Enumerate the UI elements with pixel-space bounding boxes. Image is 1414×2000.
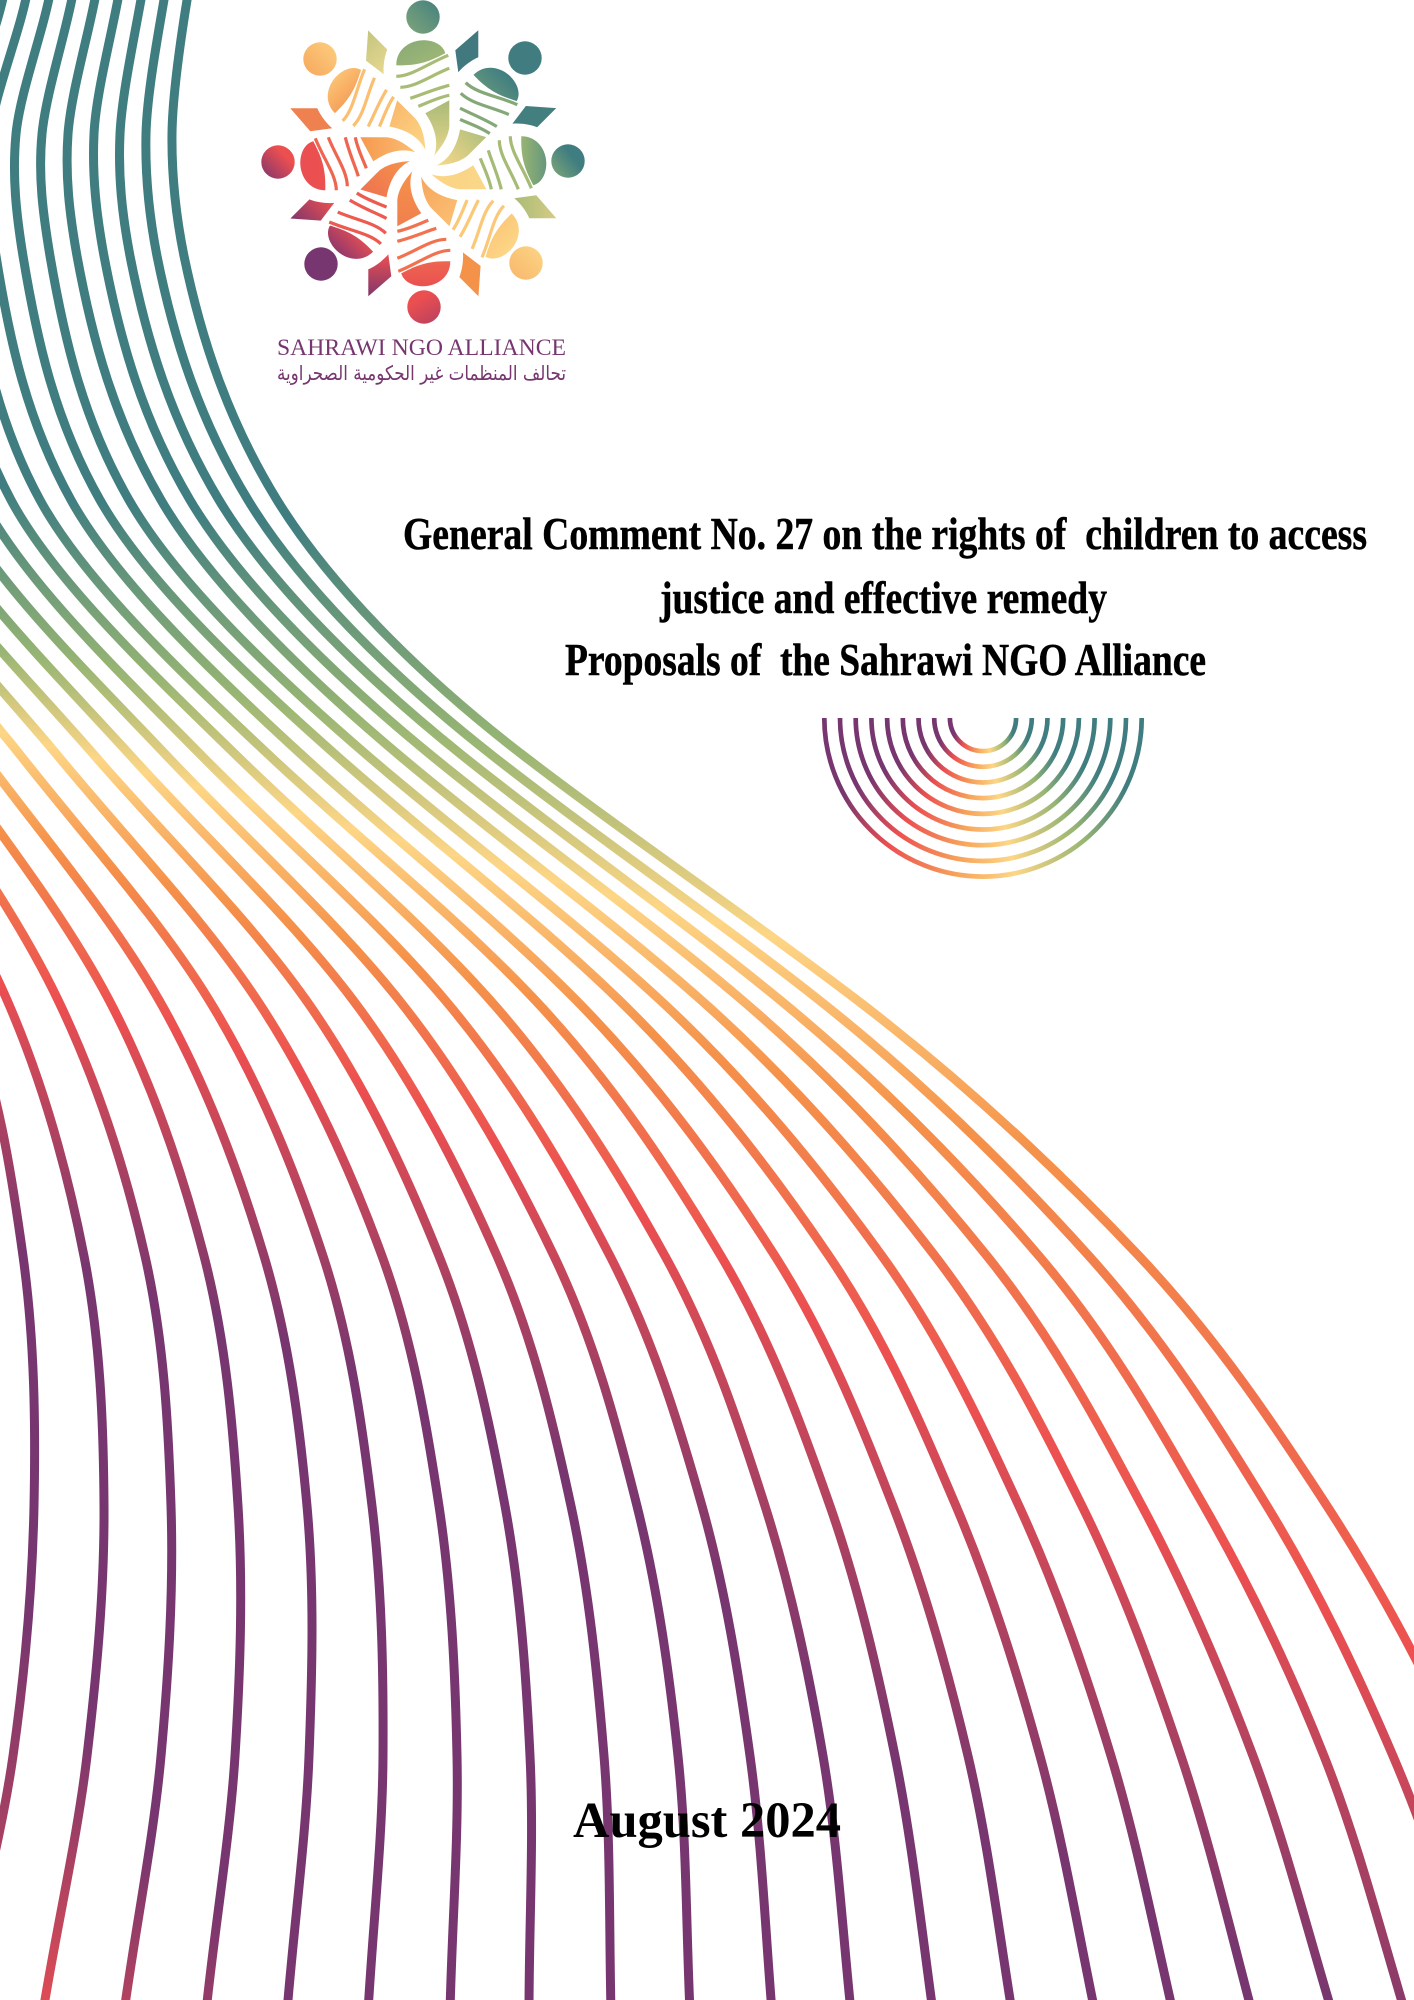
logo petal: lower left xyxy=(290,130,437,276)
logo petal: top xyxy=(396,30,478,155)
date: August 2024 xyxy=(573,1792,841,1848)
organisation name in Arabic: تحالف المنظمات غير الحكومية الصحراوية xyxy=(277,361,566,385)
logo petal: upper right xyxy=(410,50,556,197)
title xyxy=(403,508,1367,685)
title line 2: justice and effective remedy xyxy=(659,572,1107,623)
organisation name in English: SAHRAWI NGO ALLIANCE xyxy=(277,335,566,360)
logo petal: right xyxy=(431,136,556,218)
logo petal: upper left xyxy=(310,30,457,177)
logo: Sahrawi NGO Alliance emblem xyxy=(261,0,585,324)
logo petal: bottom xyxy=(368,171,450,296)
logo petal: left xyxy=(290,108,415,190)
logo petal: lower right xyxy=(390,150,536,296)
title line 3: Proposals of the Sahrawi NGO Alliance xyxy=(565,634,1206,685)
concentric half-circle rainbow motif xyxy=(824,718,1142,877)
logo ring of eight circles xyxy=(261,0,585,324)
